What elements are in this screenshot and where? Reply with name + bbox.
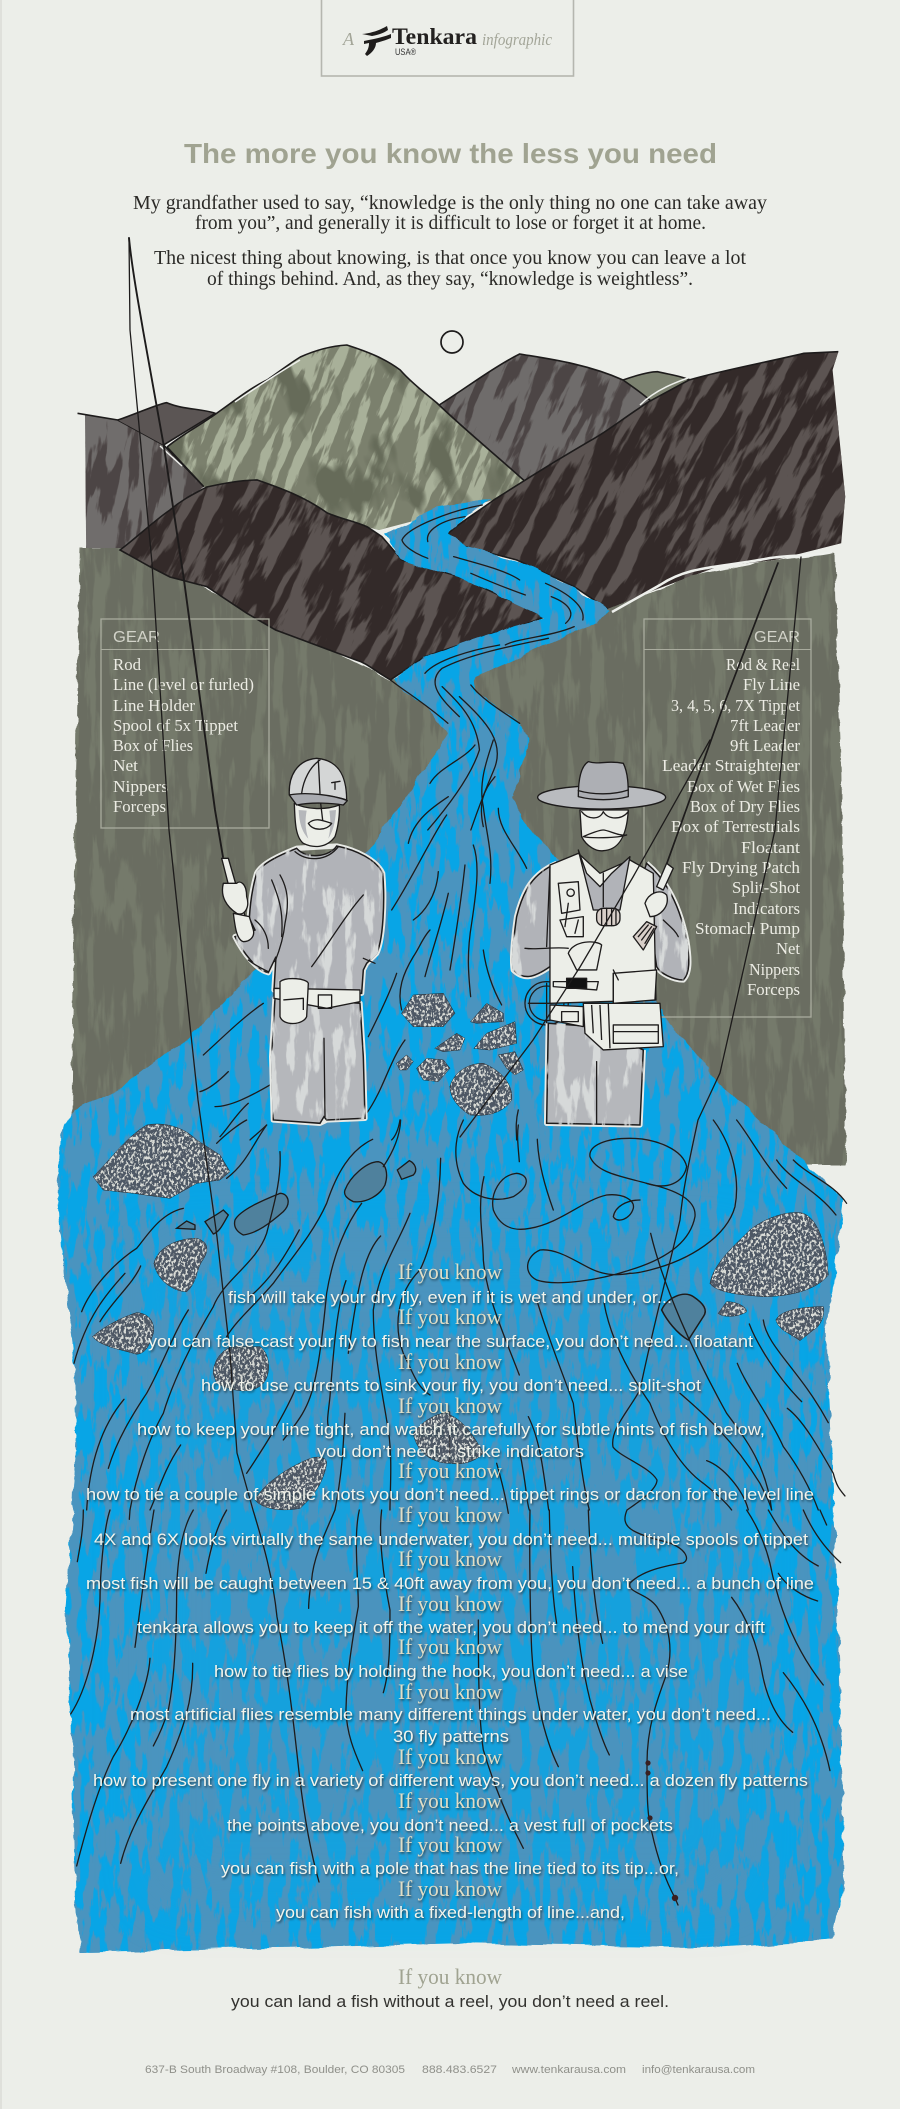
left fisherman clothing folds: [248, 875, 375, 1117]
right fisherman hands: [568, 863, 673, 970]
western rod: [667, 563, 778, 863]
left fisherman: [222, 758, 384, 1123]
closing if you know: If you know: [398, 1964, 502, 1989]
gear list right: Rod & Reel: [726, 655, 800, 674]
left fisherman halo: [235, 846, 384, 1123]
gear list right: Nippers: [749, 960, 800, 979]
gear list left: Spool of 5x Tippet: [113, 716, 238, 735]
rocks left: [93, 1124, 450, 1510]
logo panel: [322, 0, 574, 76]
statements in water: how to present one fly in a variety of different ways, you don’t need... a dozen fly patterns: [93, 1771, 808, 1790]
footer contact details: www.tenkarausa.com: [511, 2064, 626, 2076]
streams right: [481, 1120, 847, 1513]
gear list right: 3, 4, 5, 6, 7X Tippet: [671, 696, 800, 715]
if you know items in water: If you know: [398, 1546, 502, 1571]
gear list left: Forceps: [113, 797, 166, 816]
footer contact details: 637-B South Broadway #108, Boulder, CO 80305: [145, 2064, 405, 2076]
small left purple peak: [118, 402, 216, 446]
left dark mountain: [118, 479, 544, 681]
logo USA: USA®: [395, 47, 416, 57]
gear list right: Fly Drying Patch: [682, 858, 801, 877]
green foothills ground: [71, 548, 846, 1165]
rocks right: [450, 1212, 828, 1464]
gear panel: tenkara: [101, 619, 269, 828]
gear list right: Net: [776, 939, 800, 958]
right fisherman trousers: [547, 1023, 643, 1125]
statements in water: you can false-cast your fly to fish near the surface, you don’t need... floatant: [148, 1332, 753, 1351]
statements in water: how to tie flies by holding the hook, you don’t need... a vise: [214, 1662, 688, 1681]
fishing rods and lines: [129, 238, 801, 1905]
gear list right: 7ft Leader: [730, 716, 801, 735]
statements in water: [86, 1288, 814, 1922]
stream and fishermen scene: [200, 740, 689, 1140]
intro text: The nicest thing about knowing, is that once you know you can leave a lot: [154, 247, 746, 269]
gear list right: Stomach Pump: [695, 919, 800, 938]
right fisherman clothing folds: [525, 867, 678, 1123]
river streams: [390, 505, 583, 830]
if you know list: [86, 1259, 814, 1922]
intro text: [133, 192, 768, 290]
logo infographic: infographic: [482, 30, 552, 49]
statements in water: fish will take your dry fly, even if it is wet and under, or...: [228, 1288, 672, 1307]
stream lines between anglers: [200, 740, 527, 1140]
closing if you know: [231, 1964, 669, 2011]
gear list right: 9ft Leader: [730, 736, 801, 755]
statements in water: you can fish with a fixed-length of line...and,: [276, 1903, 625, 1922]
gear list left: [113, 655, 254, 816]
western fly line to hand: [460, 740, 710, 1137]
if you know items in water: If you know: [398, 1458, 502, 1483]
left fisherman head: [289, 758, 347, 859]
logo wordmark: Tenkara: [392, 24, 478, 49]
intro text: My grandfather used to say, “knowledge is the only thing no one can take away: [133, 192, 768, 214]
footer contact details: [145, 2064, 755, 2076]
statements in water: how to keep your line tight, and watch it carefully for subtle hints of fish below,: [137, 1420, 765, 1439]
statements in water: the points above, you don’t need... a vest full of pockets: [227, 1816, 673, 1835]
left purple mountain: [77, 412, 204, 548]
gear list left: Line Holder: [113, 696, 196, 715]
statements in water: you don’t need... strike indicators: [317, 1442, 584, 1461]
statements in water: most fish will be caught between 15 & 40ft away from you, you don’t need... a bunch of line: [86, 1574, 814, 1593]
logo label A: A: [342, 29, 355, 49]
closing statement: you can land a fish without a reel, you don’t need a reel.: [231, 1992, 669, 2011]
gear list left: Nippers: [113, 777, 168, 796]
if you know items in water: If you know: [398, 1349, 502, 1374]
intro text: from you”, and generally it is difficult to lose or forget it at home.: [195, 212, 706, 234]
right fisherman vest and shirt: [550, 850, 657, 1003]
statements in water: most artificial flies resemble many different things under water, you don’t need...: [130, 1705, 771, 1724]
if you know items in water: If you know: [398, 1788, 502, 1813]
small green mountain behind: [623, 370, 690, 400]
streams left: [74, 1120, 441, 1510]
gear list right: Box of Terrestrials: [671, 817, 800, 836]
stream rocks: [397, 993, 523, 1115]
gear list left: Rod: [113, 655, 142, 674]
right purple mountain: [439, 353, 651, 480]
right fisherman hip pack: [550, 1003, 663, 1050]
right fisherman head and hat: [538, 762, 666, 851]
ridge highlights: [160, 360, 832, 612]
gear panel: western fly fishing: [644, 619, 811, 1017]
if you know items in water: If you know: [398, 1591, 502, 1616]
statements in water: how to tie a couple of simple knots you don’t need... tippet rings or dacron for the level line: [86, 1485, 814, 1504]
gear list right: Leader Straightener: [662, 756, 801, 775]
if you know items in water: If you know: [398, 1393, 502, 1418]
water streams and rocks upper right: [450, 1120, 847, 1513]
statements in water: tenkara allows you to keep it off the water, you don’t need... to mend your drift: [137, 1618, 765, 1637]
water streams lower left: [71, 1510, 390, 1866]
gear list right: Box of Dry Flies: [690, 797, 800, 816]
submerged rocks left: [177, 1161, 416, 1235]
if you know items in water: If you know: [398, 1634, 502, 1659]
left fisherman rod handle and hand: [222, 858, 254, 942]
reel: [525, 982, 568, 1025]
right dark mountain: [448, 350, 846, 610]
water tone overlay: [150, 1240, 750, 1900]
tenkara rod: [129, 238, 223, 857]
central green mountain: [166, 344, 524, 530]
river and lower water: [57, 499, 844, 1952]
statements in water: 4X and 6X looks virtually the same underwater, you don’t need... multiple spools of tippet: [94, 1530, 808, 1549]
gear heading right: GEAR: [754, 629, 800, 646]
gear list right: Split-Shot: [732, 878, 800, 897]
gear heading left: GEAR: [113, 629, 160, 646]
icon: tenkara logo mark: [362, 26, 391, 56]
tenkara line: [129, 238, 319, 1882]
gear list right: Box of Wet Flies: [687, 777, 800, 796]
intro text: of things behind. And, as they say, “knowledge is weightless”.: [207, 268, 693, 290]
right fisherman halo: [513, 863, 689, 1125]
if you know items in water: If you know: [398, 1502, 502, 1527]
if you know items in water: If you know: [398, 1679, 502, 1704]
if you know items in water: [398, 1259, 502, 1901]
gear list right: Fly Line: [743, 675, 800, 694]
gear list left: Line (level or furled): [113, 675, 254, 694]
fly line loops: [456, 1120, 737, 1283]
if you know items in water: If you know: [398, 1304, 502, 1329]
footer contact details: 888.483.6527: [422, 2064, 497, 2076]
water streams lower right: [478, 1510, 841, 1848]
gear list left: Net: [113, 756, 138, 775]
title: The more you know the less you need: [184, 138, 717, 169]
western leader: [613, 557, 801, 1905]
gear list right: Floatant: [741, 838, 800, 857]
water streams and rocks upper left: [74, 1120, 450, 1510]
gear list right: [662, 655, 801, 999]
gear list right: Indicators: [733, 899, 800, 918]
gear list left: Box of Flies: [113, 736, 193, 755]
statements in water: you can fish with a pole that has the line tied to its tip...or,: [221, 1859, 679, 1878]
icon: sun: [441, 331, 463, 353]
if you know items in water: If you know: [398, 1259, 502, 1284]
right fisherman: [513, 762, 689, 1125]
fly knots: [645, 1760, 678, 1901]
statements in water: 30 fly patterns: [393, 1727, 509, 1746]
if you know items in water: If you know: [398, 1876, 502, 1901]
submerged rock right: [662, 1294, 705, 1340]
if you know items in water: If you know: [398, 1832, 502, 1857]
if you know items in water: If you know: [398, 1744, 502, 1769]
footer contact details: info@tenkarausa.com: [642, 2064, 755, 2076]
left fisherman trousers: [272, 998, 365, 1123]
left fisherman sweater: [235, 846, 384, 993]
left fisherman belt and pouch: [274, 979, 360, 1024]
right fisherman sleeves: [513, 863, 570, 977]
gear list right: Forceps: [747, 980, 800, 999]
statements in water: how to use currents to sink your fly, you don’t need... split-shot: [201, 1376, 701, 1395]
